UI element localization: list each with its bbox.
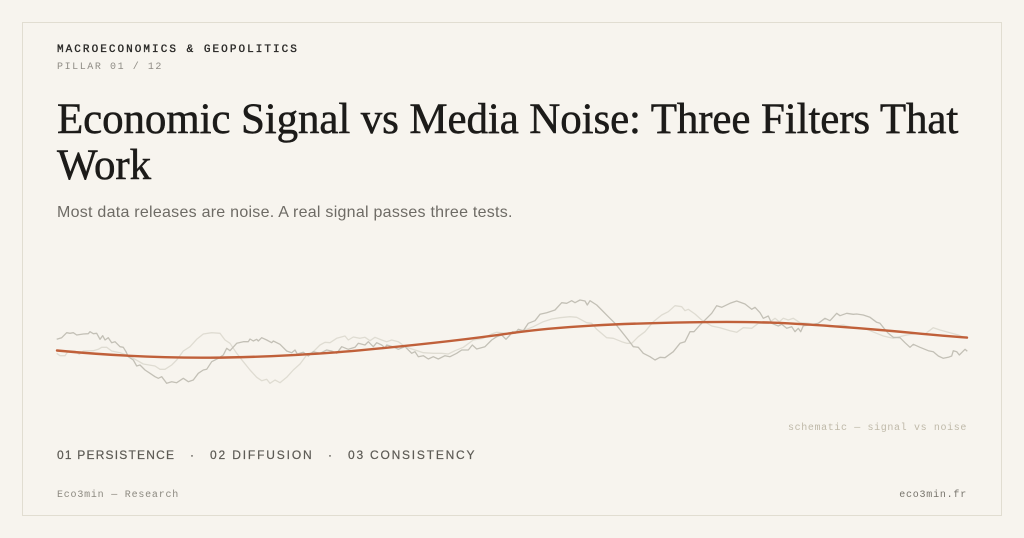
signal line: [57, 322, 967, 358]
title: [56, 96, 958, 189]
title: Economic Signal vs Media Noise: Three Filters That: [57, 96, 958, 143]
pillar label: PILLAR 01 / 12: [57, 62, 163, 73]
footer right: eco3min.fr: [899, 490, 967, 501]
filters row: [57, 448, 476, 462]
noise line: light: [57, 306, 967, 383]
footer left: Eco3min — Research: [57, 490, 179, 501]
subtitle: Most data releases are noise. A real signal passes three tests.: [57, 204, 513, 221]
filter 2: 02 DIFFUSION: [210, 448, 314, 462]
chart caption: schematic — signal vs noise: [788, 423, 967, 434]
chart: signal vs noise: [56, 299, 968, 384]
separator dot: ·: [328, 448, 332, 462]
category label: MACROECONOMICS & GEOPOLITICS: [57, 44, 299, 56]
noise line: dark: [57, 300, 967, 383]
separator dot: ·: [190, 448, 194, 462]
filter 3: 03 CONSISTENCY: [348, 448, 476, 462]
title: Work: [57, 142, 151, 189]
filter 1: 01 PERSISTENCE: [57, 448, 175, 462]
